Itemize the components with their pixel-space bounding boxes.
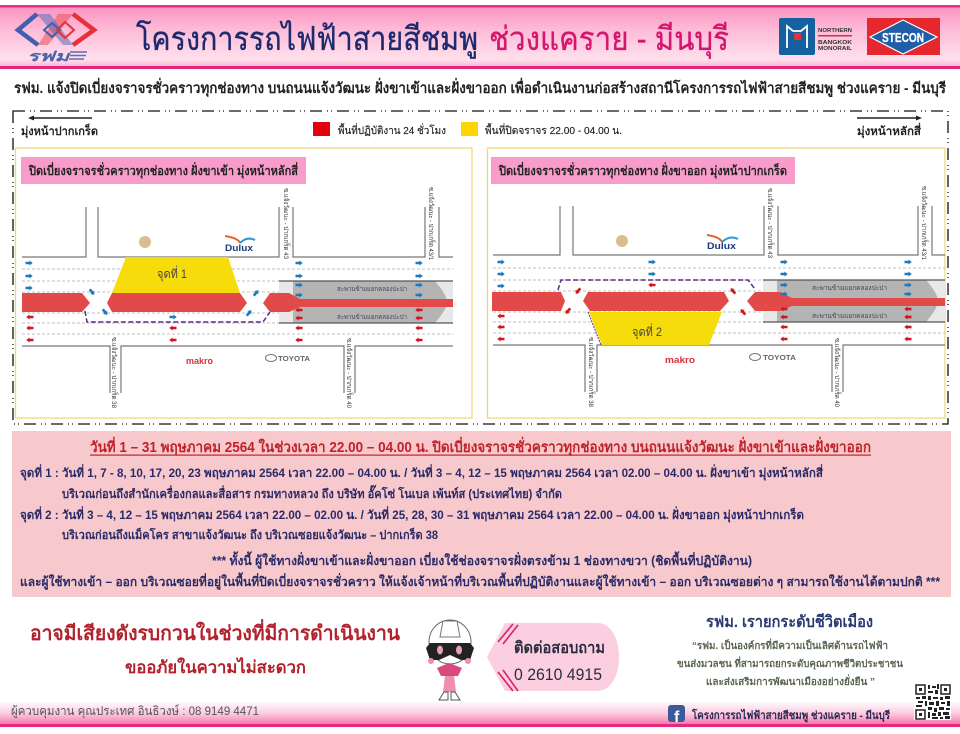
landmark: Dulux	[225, 236, 255, 253]
road edges	[493, 206, 945, 392]
panel: outbound closure map	[488, 148, 945, 418]
legend	[313, 122, 622, 137]
closure zone: point 2: จุดที่ 2	[632, 323, 662, 340]
closure zone: point 1	[112, 257, 240, 293]
site supervisor contact: ผู้ควบคุมงาน คุณประเทศ อินธิวงษ์ : 08 9149 4471	[11, 704, 259, 719]
landmark: makro: makro	[186, 356, 213, 367]
side road labels: ซ.แจ้งวัฒนะ - ปากเกร็ด 40	[345, 338, 354, 408]
direction arrow: towards Pak Kret	[21, 116, 98, 139]
traffic arrows: outbound	[497, 282, 912, 342]
logo: Northern Bangkok Monorail: MONORAIL	[818, 46, 853, 52]
mascot	[426, 620, 474, 700]
logo: STECON: STECON	[882, 30, 924, 45]
direction arrow: towards Lak Si: มุ่งหน้าหลักสี่	[857, 122, 922, 139]
noise warning: อาจมีเสียงดังรบกวนในช่วงที่มีการดำเนินงาน	[30, 618, 400, 645]
legend: พื้นที่ปิดจราจร 22.00 - 04.00 น.	[485, 123, 622, 137]
flyover: สะพานข้ามแยกคลองปะปา	[812, 312, 887, 320]
landmark: round logo	[139, 236, 151, 248]
detour route	[558, 280, 755, 345]
schedule note: และผู้ใช้ทางเข้า – ออก บริเวณซอยที่อยู่ในพื้นที่ปิดเบี่ยงจราจรชั่วคราว ให้แจ้งเจ้าหน้าที่บริเวณพื้นที่ปฏิบัติงานและผู้ใช้ทางเข้า – ออก บริเวณซอยต่าง ๆ สามารถใช้งานได้ตามปกติ ***	[20, 572, 940, 590]
landmark: Dulux: Dulux	[225, 243, 253, 253]
facebook page: โครงการรถไฟฟ้าสายสีชมพู ช่วงแคราย - มีนบุรี	[691, 708, 890, 723]
slogan: “รฟม. เป็นองค์กรที่มีความเป็นเลิศด้านรถไฟฟ้า	[692, 638, 888, 652]
logo: Northern Bangkok Monorail: BANGKOK	[818, 40, 852, 46]
side road labels: ซ.แจ้งวัฒนะ - ปากเกร็ด 38	[110, 337, 119, 408]
panel: schedule details	[12, 431, 951, 597]
landmark: Toyota: TOYOTA	[278, 354, 311, 363]
side road labels	[587, 186, 929, 407]
logo: STECON	[867, 18, 940, 55]
landmark: Dulux: Dulux	[707, 241, 736, 251]
noise warning: ขออภัยในความไม่สะดวก	[125, 657, 306, 677]
panel heading: outbound: ปิดเบี่ยงจราจรชั่วคราวทุกช่องทาง ฝั่งขาออก มุ่งหน้าปากเกร็ด	[498, 162, 787, 179]
landmark: Toyota	[750, 353, 797, 362]
landmark: Toyota: TOYOTA	[763, 353, 797, 362]
landmark: Toyota	[266, 354, 311, 363]
flyover: สะพานข้ามแยกคลองปะปา	[337, 285, 407, 293]
panel: inbound closure map	[16, 148, 472, 418]
detour route	[85, 311, 270, 322]
slogan	[677, 612, 903, 688]
facebook page	[668, 705, 890, 726]
footer band	[0, 701, 960, 727]
contact badge	[487, 623, 619, 691]
schedule point 2: บริเวณก่อนถึงแม็คโคร สาขาแจ้งวัฒนะ ถึง บริเวณซอยแจ้งวัฒนะ – ปากเกร็ด 38	[62, 527, 438, 542]
road edges	[22, 207, 453, 393]
work zone: red	[492, 292, 945, 311]
schedule heading: วันที่ 1 – 31 พฤษภาคม 2564 ในช่วงเวลา 22.00 – 04.00 น. ปิดเบี่ยงจราจรชั่วคราวทุกช่องทาง บนถนนแจ้งวัฒนะ ฝั่งขาเข้าและฝั่งขาออก	[90, 436, 871, 456]
title: ช่วงแคราย - มีนบุรี	[489, 20, 729, 59]
traffic arrows: outbound	[26, 308, 423, 342]
schedule note	[20, 551, 940, 590]
landmark: round logo	[616, 235, 628, 247]
logo: Northern Bangkok Monorail	[779, 18, 853, 55]
title	[136, 20, 729, 59]
closure zone: point 1: จุดที่ 1	[157, 265, 187, 282]
slogan: ขนส่งมวลชน ที่สามารถยกระดับคุณภาพชีวิตประชาชน	[677, 656, 903, 670]
contact badge: 0 2610 4915	[514, 666, 602, 684]
panel heading: inbound	[21, 157, 306, 184]
logo: Northern Bangkok Monorail: NORTHERN	[818, 28, 852, 34]
direction arrow: towards Pak Kret: มุ่งหน้าปากเกร็ด	[21, 123, 98, 139]
logo: MRTA	[18, 14, 94, 64]
slogan: รฟม. เรายกระดับชีวิตเมือง	[706, 612, 873, 631]
dashed frame	[13, 111, 948, 424]
traffic arrows: inbound	[498, 260, 912, 296]
side road labels: ซ.แจ้งวัฒนะ - ปากเกร็ด 40	[833, 338, 842, 407]
schedule point 1	[20, 464, 824, 501]
landmark: makro: makro	[665, 355, 695, 366]
side road labels: ซ.แจ้งวัฒนะ - ปากเกร็ด 43	[282, 188, 291, 259]
flyover: สะพานข้ามแยกคลองปะปา	[812, 284, 887, 292]
closure zone: point 2	[589, 312, 722, 345]
schedule point 2	[20, 506, 804, 542]
direction arrow: towards Lak Si	[857, 116, 922, 139]
flyover	[763, 280, 945, 322]
panel heading: inbound: ปิดเบี่ยงจราจรชั่วคราวทุกช่องทาง ฝั่งขาเข้า มุ่งหน้าหลักสี่	[28, 162, 298, 179]
contact badge: ติดต่อสอบถาม	[514, 639, 605, 657]
schedule point 2: จุดที่ 2 : วันที่ 3 – 4, 12 – 15 พฤษภาคม 2564 เวลา 22.00 – 02.00 น. / วันที่ 25, 28, 30 – 31 พฤษภาคม 2564 เวลา 22.00 – 04.00 น. ฝั่งขาออก มุ่งหน้าปากเกร็ด	[20, 506, 804, 523]
legend: พื้นที่ปฏิบัติงาน 24 ชั่วโมง	[338, 123, 446, 137]
flyover	[279, 281, 453, 323]
side road labels: ซ.แจ้งวัฒนะ - ปากเกร็ด 38	[587, 337, 596, 407]
QR code	[914, 683, 951, 720]
schedule point 1: บริเวณก่อนถึงสำนักเครื่องกลและสื่อสาร กรมทางหลวง ถึง บริษัท อั๊คโซ่ โนเบล เพ้นท์ส (ประเทศไทย) จำกัด	[62, 484, 562, 501]
schedule note: *** ทั้งนี้ ผู้ใช้ทางฝั่งขาเข้าและฝั่งขาออก เบี่ยงใช้ช่องจราจรฝั่งตรงข้าม 1 ช่องทางขวา (ชิดพื้นที่ปฏิบัติงาน)	[212, 551, 752, 569]
side road labels: ซ.แจ้งวัฒนะ - ปากเกร็ด 43/1	[920, 186, 929, 260]
facebook page: f	[674, 709, 680, 726]
landmark: Dulux	[707, 235, 738, 251]
work zone: red	[22, 293, 453, 312]
noise warning	[30, 618, 400, 677]
side road labels	[110, 187, 436, 408]
traffic arrows: inbound	[26, 260, 423, 320]
side road labels: ซ.แจ้งวัฒนะ - ปากเกร็ด 43	[766, 188, 775, 258]
flyover: สะพานข้ามแยกคลองปะปา	[337, 313, 407, 321]
schedule point 1: จุดที่ 1 : วันที่ 1, 7 - 8, 10, 17, 20, 23 พฤษภาคม 2564 เวลา 22.00 – 04.00 น. / วันที่ 3 – 4, 12 – 15 พฤษภาคม 2564 เวลา 02.00 – 04.00 น. ฝั่งขาเข้า มุ่งหน้าหลักสี่	[20, 464, 824, 481]
title: โครงการรถไฟฟ้าสายสีชมพู	[136, 20, 478, 59]
panel heading: outbound	[491, 157, 795, 184]
slogan: และส่งเสริมการพัฒนาเมืองอย่างยั่งยืน ”	[706, 674, 875, 688]
side road labels: ซ.แจ้งวัฒนะ - ปากเกร็ด 43/1	[427, 187, 436, 260]
header band	[0, 5, 960, 69]
logo: MRTA: รฟม	[27, 48, 72, 64]
